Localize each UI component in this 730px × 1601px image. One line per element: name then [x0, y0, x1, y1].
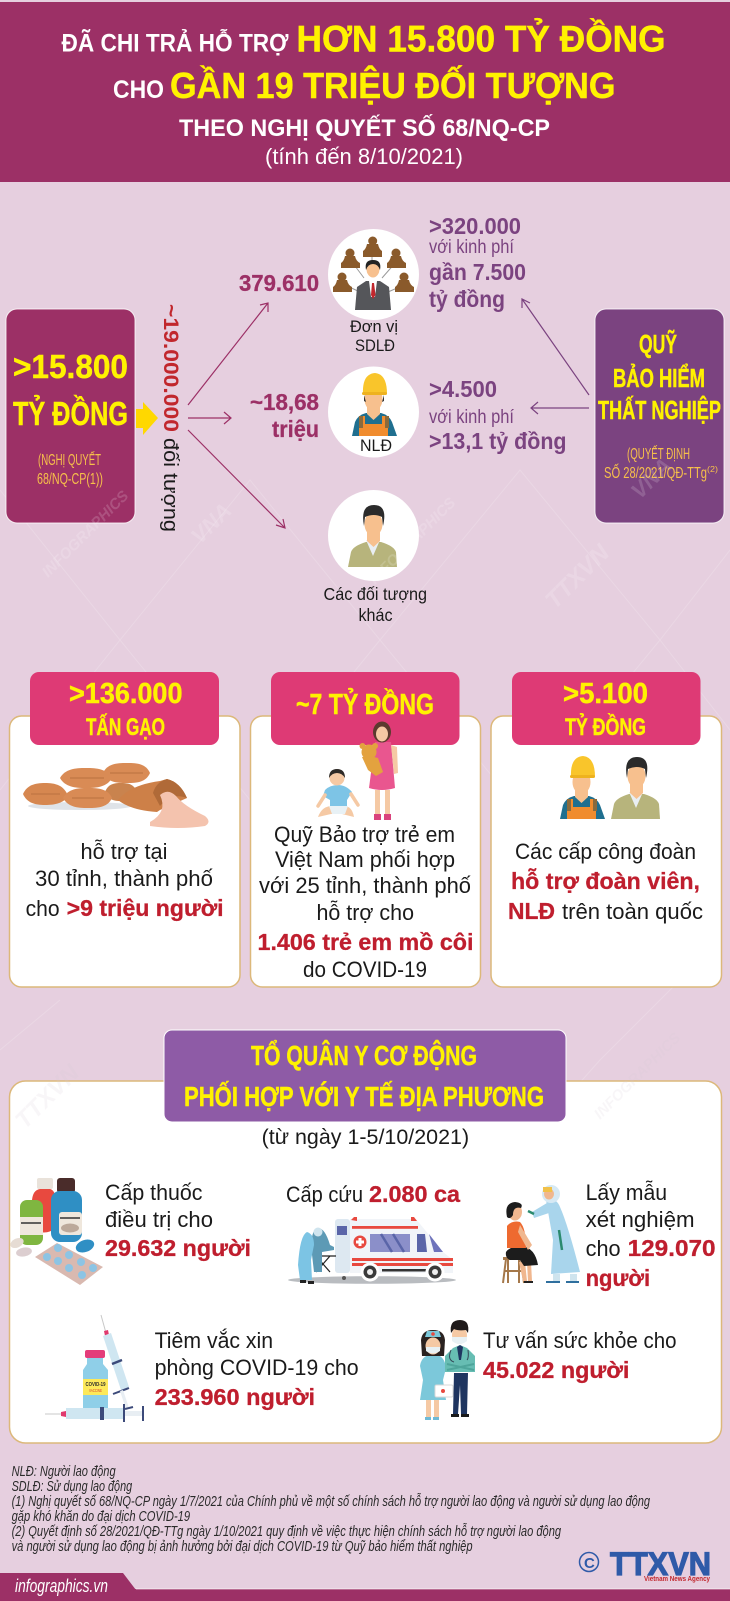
- icon: vaccine: COVID-19: [86, 1382, 106, 1388]
- icon: medicine: [9, 1178, 103, 1285]
- title line 1: [62, 18, 666, 60]
- stat: emergency: Cấp cứu: [286, 1182, 363, 1207]
- stat: employers from fund: tỷ đồng: [429, 286, 505, 312]
- stat: employers from fund: [429, 213, 526, 312]
- stat: employers count: 379.610: [239, 270, 319, 296]
- stat: workers from fund: >13,1 tỷ đồng: [429, 428, 566, 454]
- heading: medical teams: TỔ QUÂN Y CƠ ĐỘNG: [251, 1039, 477, 1071]
- panel: unemployment fund box: (QUYẾT ĐỊNH: [627, 446, 690, 463]
- watermarks: VNA: [626, 453, 676, 504]
- stat: medicine: 29.632 người: [105, 1235, 251, 1261]
- rice text: [26, 839, 224, 921]
- footnotes: (2) Quyết định số 28/2021/QĐ-TTg ngày 1/10/2021 quy định về việc thực hiện chính sách hỗ trợ người lao động: [12, 1523, 561, 1540]
- panel: total support box: [6, 309, 135, 523]
- stat: workers count: ~18,68: [250, 389, 319, 415]
- panel: orphaned children support: [250, 672, 480, 987]
- icon: yellow arrow: [136, 402, 158, 435]
- title line 1: HƠN 15.800 TỶ ĐỒNG: [296, 18, 666, 60]
- children label: ~7 TỶ ĐỒNG: [296, 687, 434, 721]
- footer bar: [0, 1573, 730, 1601]
- label: other beneficiaries: Các đối tượng: [324, 584, 427, 604]
- arrows from unemployment fund: [522, 299, 589, 414]
- children text: do COVID-19: [303, 957, 427, 982]
- icon: children: [318, 722, 398, 820]
- logo: TTXVN: Vietnam News Agency: [644, 1576, 710, 1583]
- children text: hỗ trợ cho: [316, 900, 414, 925]
- stat: vaccine: [155, 1328, 359, 1410]
- union text: [508, 839, 703, 924]
- stat: vaccine: phòng COVID-19 cho: [155, 1355, 359, 1380]
- icon: testing: [503, 1185, 580, 1283]
- date note: (tính đến 8/10/2021): [265, 144, 463, 169]
- heading: medical teams: PHỐI HỢP VỚI Y TẾ ĐỊA PHƯƠNG: [184, 1080, 544, 1112]
- stat: workers from fund: [429, 376, 566, 454]
- children text: với 25 tỉnh, thành phố: [259, 873, 471, 898]
- stat: workers from fund: >4.500: [429, 376, 497, 402]
- rice text: cho: [26, 896, 60, 921]
- stat: testing: 129.070: [628, 1235, 716, 1261]
- logo: TTXVN: TTXVN: [610, 1546, 711, 1582]
- label: workers: NLĐ: [360, 436, 392, 455]
- rice text: hỗ trợ tại: [80, 839, 168, 864]
- footnotes: [12, 1464, 650, 1555]
- watermarks: INFOGRAPHICS: [591, 1029, 684, 1123]
- stat: health consulting: Tư vấn sức khỏe cho: [483, 1328, 676, 1353]
- stat: testing: [586, 1180, 716, 1291]
- circle: workers: [328, 366, 419, 458]
- rice text: 30 tỉnh, thành phố: [35, 866, 213, 891]
- watermarks: INFOGRAPHICS: [39, 487, 132, 581]
- icon: man: [611, 757, 660, 819]
- label: employers: Đơn vị: [350, 317, 398, 336]
- icon: vaccine: VACCINE: [89, 1388, 102, 1393]
- children text: 1.406 trẻ em mồ côi: [258, 929, 474, 955]
- footnotes: gặp khó khăn do đại dịch COVID-19: [12, 1509, 190, 1525]
- panel: unemployment fund box: QUỸ: [639, 329, 677, 359]
- vertical label: 19 million beneficiaries: đối tượng: [159, 438, 181, 532]
- stat: health consulting: [483, 1328, 676, 1383]
- panel: unemployment fund box: [595, 309, 724, 523]
- rice label: [30, 672, 219, 745]
- label: employers: [350, 317, 398, 355]
- icon: rice sacks: [23, 763, 208, 828]
- stat: health consulting: 45.022 người: [483, 1357, 629, 1383]
- watermarks: TTXVN: [540, 539, 615, 614]
- footnotes: NLĐ: Người lao động: [12, 1464, 116, 1480]
- icon: medical staff: [420, 1320, 475, 1420]
- rice label: TẤN GẠO: [86, 713, 165, 741]
- title line 2: CHO: [113, 76, 164, 104]
- panel: rice support: [10, 672, 240, 987]
- union label: TỶ ĐỒNG: [565, 712, 646, 741]
- label: other beneficiaries: khác: [358, 605, 393, 625]
- circle: other beneficiaries: [328, 490, 419, 581]
- label: other beneficiaries: [324, 584, 427, 625]
- watermarks: INFOGRAPHICS: [366, 494, 459, 588]
- title line 2: GẦN 19 TRIỆU ĐỐI TƯỢNG: [170, 64, 616, 106]
- footnotes: SDLĐ: Sử dụng lao động: [12, 1479, 132, 1495]
- stat: testing: người: [586, 1265, 650, 1291]
- stat: medicine: điều trị cho: [105, 1207, 213, 1232]
- union text: Các cấp công đoàn: [515, 839, 696, 864]
- title line 1: ĐÃ CHI TRẢ HỖ TRỢ: [62, 28, 289, 58]
- union text: NLĐ: [508, 898, 555, 924]
- stat: employers from fund: gần 7.500: [429, 259, 526, 285]
- subtitle: THEO NGHỊ QUYẾT SỐ 68/NQ-CP: [179, 114, 550, 142]
- footer bar: infographics.vn: [15, 1576, 108, 1596]
- union text: hỗ trợ đoàn viên,: [511, 867, 700, 894]
- stat: workers count: triệu: [272, 416, 319, 442]
- stat: testing: xét nghiệm: [586, 1207, 695, 1232]
- header banner: [0, 2, 730, 182]
- stat: emergency: [286, 1181, 460, 1207]
- union text: trên toàn quốc: [562, 899, 703, 924]
- stat: vaccine: Tiêm vắc xin: [155, 1328, 273, 1353]
- footnotes: và người sử dụng lao động bị ảnh hưởng bởi đại dịch COVID-19 từ Quỹ bảo hiểm thất nghiệp: [12, 1539, 473, 1555]
- stat: medicine: [105, 1180, 251, 1261]
- icon: ambulance: [288, 1217, 456, 1284]
- stat: workers count: [250, 389, 319, 442]
- panel: unemployment fund box: (2): [707, 465, 718, 474]
- children label: [271, 672, 460, 745]
- panel: total support box: TỶ ĐỒNG: [13, 395, 128, 432]
- children text: Quỹ Bảo trợ trẻ em: [274, 822, 455, 847]
- logo: TTXVN: C: [584, 1555, 595, 1572]
- stat: testing: cho: [586, 1236, 621, 1261]
- stat: vaccine: 233.960 người: [155, 1384, 315, 1410]
- stat: emergency: 2.080 ca: [369, 1181, 460, 1207]
- icon: worker: [560, 756, 605, 819]
- stat: testing: Lấy mẫu: [586, 1180, 667, 1205]
- children text: Việt Nam phối hợp: [275, 847, 455, 872]
- children text: [258, 822, 474, 982]
- union label: [512, 672, 700, 745]
- watermarks: TTXVN: [10, 1059, 85, 1134]
- heading: medical teams: [164, 1030, 566, 1122]
- stat: employers from fund: >320.000: [429, 213, 521, 239]
- date range: (từ ngày 1-5/10/2021): [262, 1126, 469, 1149]
- rice text: >9 triệu người: [67, 895, 224, 921]
- stat: workers from fund: với kinh phí: [429, 407, 515, 428]
- arrows from centre to beneficiaries: [188, 303, 285, 528]
- panel: trade union support: [491, 672, 722, 987]
- vertical label: 19 million beneficiaries: [159, 304, 182, 532]
- icon: vaccine: [45, 1315, 144, 1422]
- watermarks: [10, 453, 684, 1134]
- union label: >5.100: [563, 678, 648, 710]
- watermarks: VNA: [186, 498, 236, 549]
- stat: employers from fund: với kinh phí: [429, 237, 515, 258]
- label: employers: SDLĐ: [355, 336, 395, 355]
- panel: total support box: 68/NQ-CP(1)): [37, 471, 103, 488]
- panel: total support box: >15.800: [13, 348, 128, 385]
- rice label: >136.000: [69, 678, 182, 710]
- stat: medicine: Cấp thuốc: [105, 1180, 202, 1205]
- circle: employers: [328, 229, 419, 320]
- panel: total support box: (NGHỊ QUYẾT: [38, 450, 101, 469]
- vertical label: 19 million beneficiaries: ~19.000.000: [159, 304, 182, 432]
- panel: military medical teams: [9, 1030, 721, 1443]
